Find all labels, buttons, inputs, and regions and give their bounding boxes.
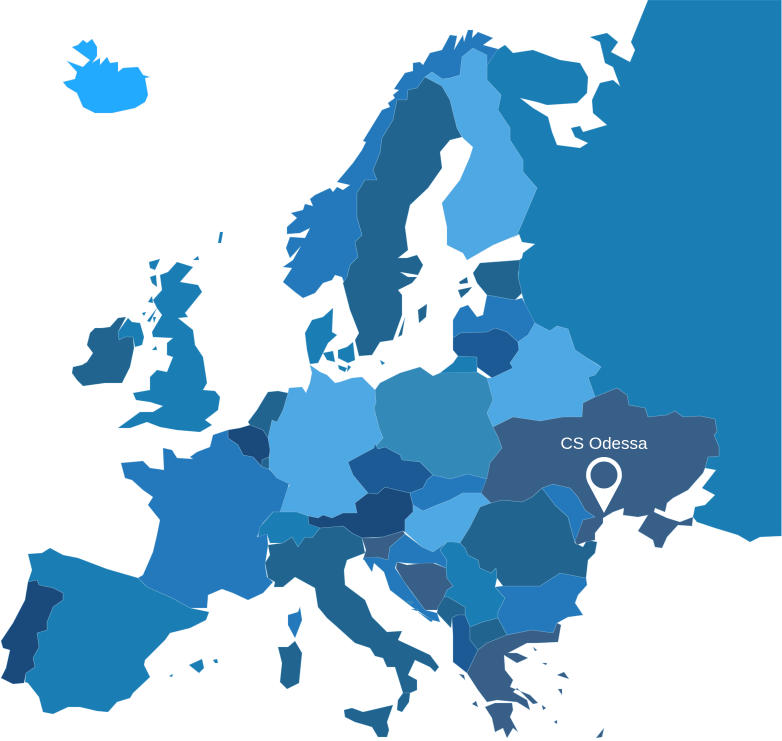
region: Ukraine xyxy=(481,388,719,548)
region: Netherlands xyxy=(248,391,288,438)
region: Bosnia and Herzegovina xyxy=(396,562,453,610)
region: Italy, Sardinia and Sicily xyxy=(265,526,439,737)
region: Austria xyxy=(308,487,413,538)
region: Ireland xyxy=(72,317,134,386)
region: Russia xyxy=(487,0,782,542)
region: Sweden xyxy=(343,77,462,356)
icon: location pin xyxy=(586,457,622,513)
region: Montenegro xyxy=(437,597,465,628)
region: Germany xyxy=(268,365,383,518)
region: Romania xyxy=(460,488,597,586)
region: Poland xyxy=(374,367,502,479)
region: North Macedonia xyxy=(470,618,507,650)
region: Portugal xyxy=(1,580,63,684)
region: Finland xyxy=(425,48,537,260)
region: United Kingdom xyxy=(118,232,223,432)
region: Slovakia xyxy=(410,474,487,511)
label: CS Odessa: CS Odessa xyxy=(561,434,648,453)
region: Estonia xyxy=(458,260,522,300)
region: Belarus xyxy=(487,323,601,427)
region: Greece xyxy=(459,623,604,738)
region: Serbia xyxy=(440,542,505,627)
region: Latvia xyxy=(453,295,535,342)
region: Albania xyxy=(452,615,478,673)
region: Kaliningrad xyxy=(440,356,477,375)
region: Switzerland xyxy=(258,512,320,547)
region: Hungary xyxy=(405,493,491,552)
region: Luxembourg xyxy=(262,457,269,469)
region: Croatia xyxy=(363,534,447,622)
region: Denmark xyxy=(305,308,385,372)
region: Bulgaria xyxy=(495,573,587,635)
region: Iceland xyxy=(63,39,150,113)
region: Norway xyxy=(283,30,498,298)
region: Slovenia xyxy=(362,531,405,560)
region: Belgium xyxy=(228,425,270,467)
region: Moldova xyxy=(542,484,595,543)
region: France and Corsica xyxy=(121,430,302,638)
region: Czech Republic xyxy=(348,444,433,494)
region: Lithuania xyxy=(453,328,519,378)
region: Spain and Balearics xyxy=(25,548,218,714)
